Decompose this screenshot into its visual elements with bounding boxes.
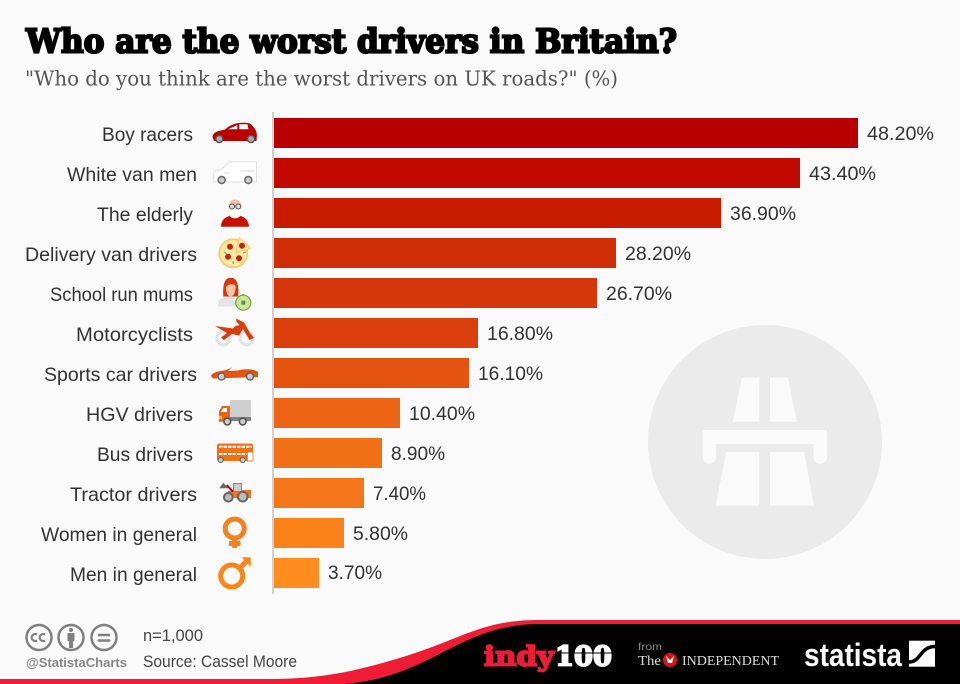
row: School run mums — [50, 278, 672, 308]
logo: The Independent: The — [638, 654, 661, 669]
row: Boy racers: 48.20% — [867, 123, 934, 145]
logo: The Independent — [638, 642, 779, 669]
icon: double-decker bus — [217, 444, 253, 462]
handle: @StatistaCharts — [26, 655, 127, 670]
row: Tractor drivers — [70, 478, 426, 508]
icons: creative commons — [26, 625, 116, 650]
row: Tractor drivers: 7.40% — [373, 483, 426, 505]
row: Bus drivers — [97, 438, 445, 468]
row: The elderly — [97, 198, 796, 228]
row: Delivery van drivers: 28.20% — [625, 243, 691, 265]
row: Women in general: 5.80% — [353, 523, 408, 545]
row: Boy racers: Boy racers — [102, 124, 193, 146]
logo: indy100: indy — [484, 642, 555, 672]
row: White van men: 43.40% — [809, 163, 876, 185]
bar chart — [25, 112, 934, 594]
icon: tractor — [219, 483, 251, 502]
row: Women in general: Women in general — [41, 524, 197, 546]
sample size note: n=1,000 — [143, 627, 203, 645]
title: Who are the worst drivers in Britain? — [25, 22, 677, 60]
row: White van men — [67, 158, 876, 188]
logo: The Independent: INDEPENDENT — [682, 654, 779, 669]
row: Boy racers — [102, 118, 934, 148]
row: School run mums: 26.70% — [606, 283, 672, 305]
row: Men in general: 3.70% — [328, 562, 382, 584]
row: Sports car drivers — [44, 358, 543, 388]
row: Bus drivers: 8.90% — [391, 443, 445, 465]
icon: female symbol — [225, 519, 244, 548]
row: Women in general — [41, 518, 408, 548]
row: Delivery van drivers — [25, 238, 691, 268]
row: Motorcyclists — [76, 318, 553, 348]
icon: sports car — [211, 368, 258, 380]
logo: statista: statista — [804, 637, 902, 673]
row: HGV drivers: HGV drivers — [86, 404, 193, 426]
row: HGV drivers — [86, 398, 475, 428]
subtitle: "Who do you think are the worst drivers on UK roads?" (%) — [25, 66, 618, 90]
icon: white van — [214, 162, 256, 184]
row: HGV drivers: 10.40% — [409, 403, 475, 425]
row: Tractor drivers: Tractor drivers — [70, 484, 197, 506]
icon: HGV truck — [219, 400, 251, 425]
icon: pizza — [219, 237, 251, 267]
row: Motorcyclists: Motorcyclists — [76, 324, 193, 346]
logo: indy100: 100 — [555, 642, 612, 672]
icon: motorway sign watermark — [648, 325, 882, 559]
row: Delivery van drivers: Delivery van drivers — [25, 244, 197, 266]
row: The elderly: 36.90% — [730, 203, 796, 225]
icon: elderly man — [221, 200, 249, 227]
icon: school run mum with apple — [218, 278, 251, 310]
icon: male symbol — [221, 557, 251, 587]
row: Men in general: Men in general — [70, 564, 197, 586]
row: Bus drivers: Bus drivers — [97, 444, 193, 466]
row: School run mums: School run mums — [50, 284, 193, 306]
row: Sports car drivers: 16.10% — [478, 363, 543, 385]
icon: red car — [212, 123, 257, 143]
row: The elderly: The elderly — [97, 204, 193, 226]
source: Source: Cassel Moore — [143, 653, 297, 671]
row: Men in general — [70, 558, 382, 588]
row: White van men: White van men — [67, 164, 197, 186]
row: Motorcyclists: 16.80% — [487, 323, 553, 345]
logo: The Independent: from — [638, 642, 662, 653]
logo: indy100 — [484, 642, 613, 672]
footer ribbon — [0, 620, 960, 684]
icon: motorcycle — [215, 318, 254, 345]
row: Sports car drivers: Sports car drivers — [44, 364, 197, 386]
